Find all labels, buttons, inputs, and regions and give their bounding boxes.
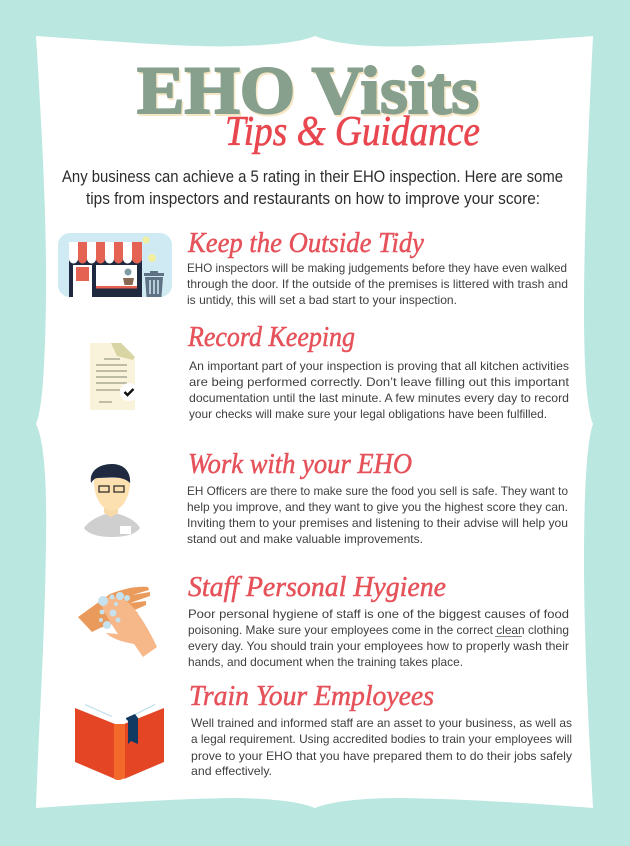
text: record keeping: are being performed correctly. Don’t leave filling out this important <box>189 376 570 389</box>
text: record keeping <box>189 360 570 421</box>
text: hygiene <box>188 608 569 669</box>
title: EHO Visits <box>138 54 480 130</box>
text: work with EHO: EH Officers are there to make sure the food you sell is safe. They want to <box>187 485 568 498</box>
text: train employees: prove to your EHO that you have prepared them to do their jobs safely <box>191 750 572 763</box>
text: outside tidy <box>187 262 568 307</box>
text: record keeping: your checks will make sure your legal obligations have been fulfilled. <box>189 408 547 421</box>
text: record keeping: documentation until the last minute. A few minutes every day to record <box>189 392 569 405</box>
heading: Keep the Outside Tidy: Keep the Outside Tidy <box>187 227 424 259</box>
text: work with EHO: Inviting them to your premises and listening to their advise will help you <box>187 517 568 530</box>
heading: Staff Personal Hygiene: Staff Personal Hygiene <box>188 571 446 603</box>
icon: inspector with glasses <box>84 464 140 537</box>
heading: Train Your Employees: Train Your Employees <box>189 680 434 712</box>
text: outside tidy: is untidy, this will set a bad start to your inspection. <box>187 294 457 307</box>
text: hygiene: poisoning. Make sure your employees come in the correct clean clothing <box>188 624 569 637</box>
text: train employees: a legal requirement. Using accredited bodies to train your employees will <box>191 733 572 746</box>
icon: hands washing <box>78 587 157 657</box>
text: outside tidy: through the door. If the outside of the premises is littered with trash and <box>187 278 568 291</box>
text: hygiene: Poor personal hygiene of staff is one of the biggest causes of food <box>188 608 569 621</box>
text: work with EHO <box>187 485 568 546</box>
text: hygiene: hands, and document when the training takes place. <box>188 656 463 669</box>
text: train employees: Well trained and informed staff are an asset to your business, as well as <box>191 717 572 730</box>
icon: document with check <box>90 343 138 410</box>
icon: open red book <box>75 704 164 780</box>
subtitle: Tips & Guidance <box>225 109 480 155</box>
title: EHO Visits <box>137 52 479 128</box>
heading: Record Keeping: Record Keeping <box>187 321 355 353</box>
heading: Work with your EHO: Work with your EHO <box>188 448 412 480</box>
text: train employees <box>191 717 572 778</box>
intro text <box>62 168 563 208</box>
intro text: Any business can achieve a 5 rating in their EHO inspection. Here are some <box>62 168 563 186</box>
text: train employees: and effectively. <box>191 765 272 778</box>
icon: shop front with trash can <box>58 233 172 297</box>
text: record keeping: An important part of your inspection is proving that all kitchen activities <box>189 360 569 373</box>
text: hygiene: every day. You should train your employees how to properly wash their <box>188 640 569 653</box>
text: work with EHO: stand out and make valuable improvements. <box>187 533 423 546</box>
text: outside tidy: EHO inspectors will be making judgements before they have even walked <box>187 262 567 275</box>
text: work with EHO: help you improve, and they want to give you the highest score they can. <box>187 501 568 514</box>
intro text: tips from inspectors and restaurants on how to improve your score: <box>86 190 540 208</box>
